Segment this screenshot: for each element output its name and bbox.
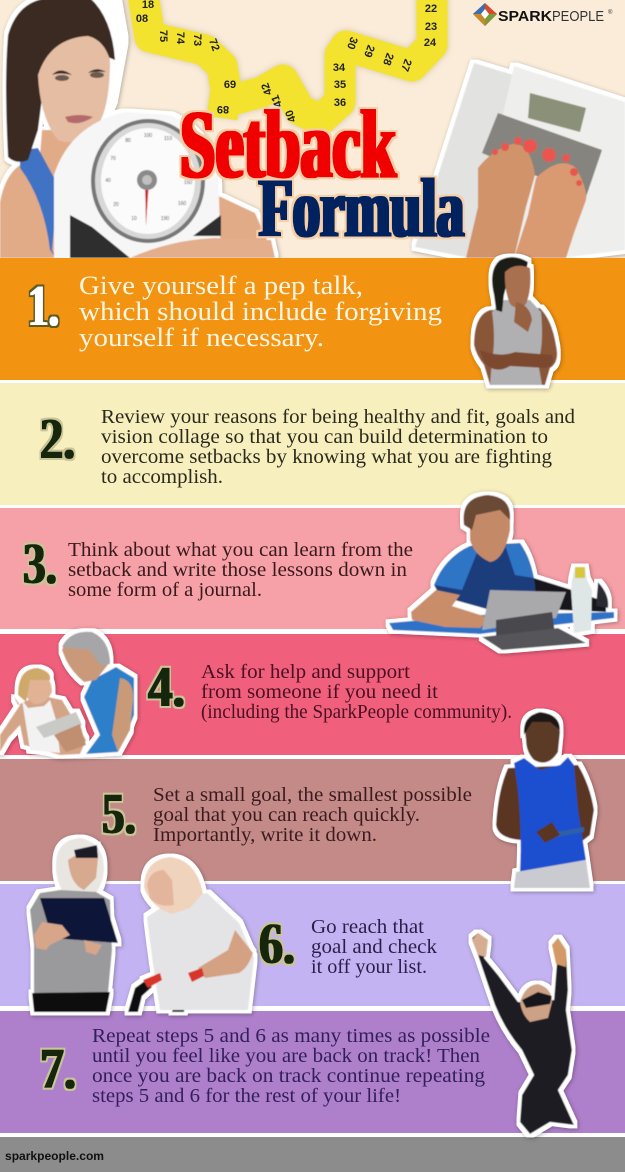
step 6 text: Go reach that bbox=[311, 916, 424, 938]
panel: step 4 bbox=[0, 634, 625, 755]
icon: woman with dial scale: 110 bbox=[164, 136, 172, 142]
measuring tape: 34 bbox=[333, 62, 346, 74]
step 3 text: some form of a journal. bbox=[68, 579, 262, 601]
step 3 text: setback and write those lessons down in bbox=[68, 559, 407, 581]
logo: SPARK bbox=[498, 8, 552, 25]
step number 7: 7. bbox=[40, 1036, 76, 1101]
step 2 text: overcome setbacks by knowing what you are fighting bbox=[101, 446, 552, 468]
measuring tape: 36 bbox=[334, 97, 346, 109]
step 5 text: Set a small goal, the smallest possible bbox=[153, 784, 472, 806]
logo bbox=[473, 3, 613, 26]
measuring tape: 29 bbox=[361, 43, 377, 59]
step 4 text bbox=[201, 661, 512, 723]
measuring tape bbox=[136, 0, 437, 124]
photo: trainer and woman with tablet bbox=[0, 632, 134, 755]
footer url: sparkpeople.com bbox=[5, 1151, 104, 1163]
step 6 text: goal and check bbox=[311, 936, 438, 958]
step 6 text bbox=[311, 916, 438, 978]
measuring tape: 35 bbox=[334, 79, 346, 91]
step 7 text: steps 5 and 6 for the rest of your life! bbox=[92, 1085, 401, 1107]
step number 2: 2. bbox=[40, 406, 75, 471]
photo: jumping woman bbox=[472, 933, 574, 1134]
header panel bbox=[0, 0, 625, 258]
panel: step 2 bbox=[0, 383, 625, 505]
title bbox=[180, 91, 464, 255]
icon: woman with dial scale: 100 bbox=[144, 133, 152, 139]
panel: step 5 bbox=[0, 759, 625, 881]
step number 3: 3. bbox=[23, 531, 57, 596]
photo: man in blue tank with phone bbox=[496, 712, 594, 888]
icon: woman with dial scale: 70 bbox=[110, 156, 116, 162]
measuring tape: 23 bbox=[425, 21, 437, 33]
step 2 text: to accomplish. bbox=[101, 466, 223, 488]
measuring tape: 89 bbox=[217, 103, 229, 115]
icon: woman with dial scale: 130 bbox=[182, 156, 190, 162]
logo: ® bbox=[608, 9, 613, 16]
step 2 text: Review your reasons for being healthy and fit, goals and bbox=[101, 406, 575, 428]
footer bar bbox=[0, 1137, 625, 1172]
step 4 text: Ask for help and support bbox=[201, 661, 410, 683]
measuring tape: 75 bbox=[157, 30, 169, 42]
measuring tape: 30 bbox=[344, 35, 360, 51]
step 1 text bbox=[79, 271, 442, 352]
icon: woman with dial scale: 160 bbox=[178, 201, 186, 207]
step 7 text: once you are back on track continue repeating bbox=[92, 1065, 485, 1087]
step number 5: 5. bbox=[102, 781, 136, 846]
step 1 text: yourself if necessary. bbox=[79, 323, 324, 352]
measuring tape: 74 bbox=[174, 32, 186, 45]
panel: step 1 bbox=[0, 258, 625, 380]
step 5 text: goal that you can reach quickly. bbox=[153, 804, 420, 826]
photo: older woman with walker bbox=[128, 857, 254, 1012]
icon: woman with dial scale bbox=[0, 0, 275, 258]
measuring tape: 69 bbox=[224, 79, 236, 91]
step 5 text bbox=[153, 784, 472, 846]
logo: PEOPLE bbox=[552, 8, 604, 25]
measuring tape: 41 bbox=[269, 93, 285, 109]
step 6 text: it off your list. bbox=[311, 956, 427, 978]
measuring tape: 73 bbox=[191, 34, 203, 46]
step 1 text: which should include forgiving bbox=[79, 297, 442, 326]
icon: feet on bathroom scale bbox=[415, 63, 625, 258]
measuring tape: 27 bbox=[398, 57, 414, 73]
step number 6: 6. bbox=[259, 911, 295, 976]
step 1 text: Give yourself a pep talk, bbox=[79, 271, 363, 300]
panel: step 6 bbox=[0, 884, 625, 1006]
icon: woman with dial scale: 80 bbox=[125, 138, 131, 144]
step 4 text: (including the SparkPeople community). bbox=[201, 701, 512, 723]
measuring tape: 72 bbox=[206, 37, 222, 53]
icon: woman with dial scale: 150 bbox=[184, 180, 192, 186]
photo: woman with clipboard bbox=[30, 838, 118, 1012]
icon: woman with dial scale: 20 bbox=[113, 202, 119, 208]
icon: woman with dial scale: 40 bbox=[105, 178, 111, 184]
step number 1: 1. bbox=[28, 273, 59, 338]
step 7 text bbox=[92, 1025, 490, 1107]
measuring tape: 08 bbox=[136, 13, 148, 25]
step 5 text: Importantly, write it down. bbox=[153, 824, 377, 846]
photo: man with tablet on mat bbox=[389, 495, 614, 650]
measuring tape: 24 bbox=[424, 37, 437, 49]
step 7 text: Repeat steps 5 and 6 as many times as possible bbox=[92, 1025, 490, 1047]
step 2 text bbox=[101, 406, 575, 488]
step 7 text: until you feel like you are back on track! Then bbox=[92, 1045, 480, 1067]
panel: step 3 bbox=[0, 508, 625, 629]
step 2 text: vision collage so that you can build determination to bbox=[101, 426, 548, 448]
step 3 text: Think about what you can learn from the bbox=[68, 539, 413, 561]
icon: woman with dial scale: 190 bbox=[161, 216, 169, 222]
photo: thinking woman bbox=[474, 257, 557, 385]
measuring tape: 42 bbox=[259, 81, 275, 97]
title: Setback bbox=[180, 91, 396, 199]
panel: step 7 bbox=[0, 1011, 625, 1133]
measuring tape: 40 bbox=[283, 108, 299, 124]
title: Formula bbox=[259, 162, 464, 255]
step 3 text bbox=[68, 539, 413, 601]
measuring tape: 22 bbox=[425, 3, 437, 15]
step 4 text: from someone if you need it bbox=[201, 681, 438, 703]
icon: woman with dial scale: 10 bbox=[131, 216, 137, 222]
measuring tape: 28 bbox=[380, 51, 396, 67]
step number 4: 4. bbox=[148, 654, 185, 719]
